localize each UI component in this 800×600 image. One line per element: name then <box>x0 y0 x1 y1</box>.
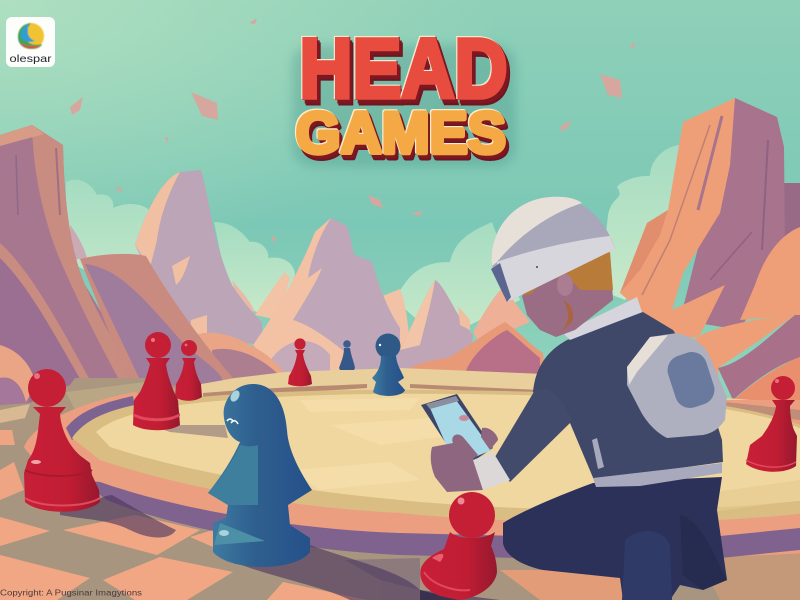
backpack <box>627 333 727 438</box>
hand <box>431 435 483 492</box>
figure: person with phone <box>421 197 727 600</box>
title shadow <box>292 45 516 167</box>
logo badge <box>6 17 55 67</box>
icon: blue pawn large with face <box>208 384 312 567</box>
far mountains <box>70 225 530 372</box>
logo wordmark: olespar <box>10 53 52 65</box>
middle mountain <box>135 170 262 345</box>
title word: GAMES: GAMES <box>296 101 506 166</box>
title word: HEAD: HEAD <box>300 22 508 116</box>
title word: HEAD: HEAD <box>302 25 510 119</box>
left cliffs <box>0 125 233 405</box>
right cliffs <box>620 98 800 410</box>
icon: red pawn middle left <box>133 332 180 430</box>
low orange rock <box>198 333 285 380</box>
board sand surface <box>72 390 800 523</box>
neck and face <box>522 253 613 337</box>
phone <box>421 394 493 470</box>
ear <box>557 274 573 296</box>
icon: red pawn far center <box>288 338 312 386</box>
center mountain <box>253 218 400 374</box>
cuff <box>473 452 510 490</box>
title word: HEAD: HEAD <box>303 27 511 121</box>
jacket arm <box>492 389 572 482</box>
title word: GAMES: GAMES <box>299 106 509 171</box>
sky background <box>0 0 800 410</box>
helmet <box>492 197 615 302</box>
icon: red pawn large left <box>24 369 100 512</box>
icon: red pawn small left <box>175 340 202 401</box>
jacket pocket <box>592 438 604 469</box>
collar <box>563 297 642 340</box>
copyright caption: Copyright: A Pugsinar Imagytions <box>0 588 142 598</box>
jacket hem <box>593 463 722 487</box>
title: head games <box>292 20 516 171</box>
title word: GAMES: GAMES <box>296 101 506 166</box>
icon: red pawn foreground <box>420 492 497 600</box>
torso <box>533 312 723 480</box>
title word: GAMES: GAMES <box>298 104 508 169</box>
clouds <box>66 145 690 340</box>
icon: blue pawn medium <box>372 334 405 396</box>
board outer rim <box>24 384 800 560</box>
falling rock shards <box>70 18 635 243</box>
title word: HEAD: HEAD <box>300 22 508 116</box>
trousers <box>503 477 727 600</box>
game floor <box>0 368 800 600</box>
icon: blue pawn small <box>339 340 355 370</box>
pawn shadows <box>60 425 500 600</box>
icon: red pawn right <box>746 376 797 472</box>
title word: HEAD: HEAD <box>298 20 506 114</box>
orange rock behind the figure <box>410 322 545 378</box>
title word: GAMES: GAMES <box>295 100 505 165</box>
logo mark <box>18 23 44 49</box>
hair <box>522 252 613 296</box>
